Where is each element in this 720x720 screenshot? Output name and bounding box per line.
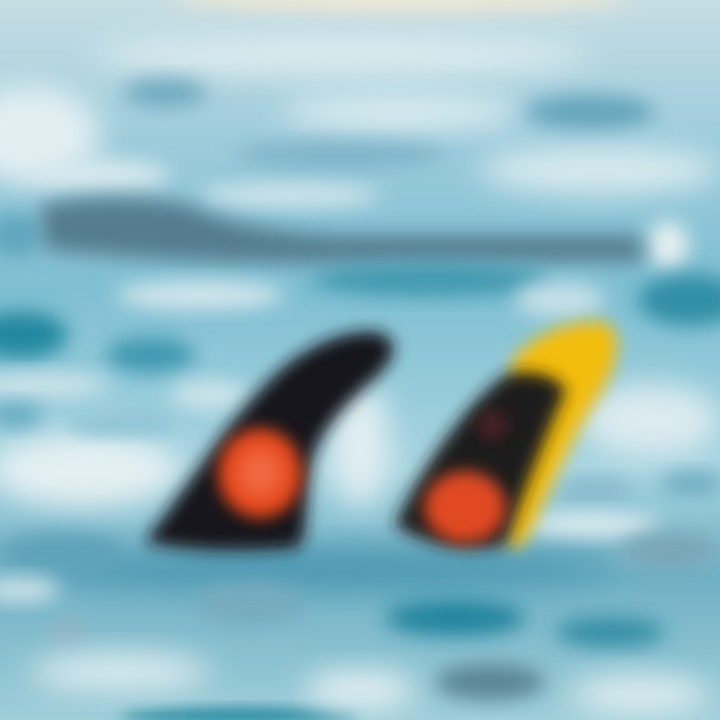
horizon band: distant dark wave <box>40 198 645 264</box>
right fin orange logo <box>424 471 506 543</box>
middle water: teal swell patches and foam <box>0 264 720 537</box>
left fin logo highlight <box>238 449 282 497</box>
left fin orange logo <box>218 428 302 518</box>
right fin small red mark <box>477 410 507 440</box>
right fin body <box>395 372 566 548</box>
upper water highlights and ripples <box>0 0 720 269</box>
left fin body <box>145 332 393 550</box>
lower water: waterline and reflections <box>0 532 720 720</box>
right fin <box>395 321 617 548</box>
left fin <box>145 332 393 550</box>
right fin yellow edge and tip <box>505 321 617 546</box>
